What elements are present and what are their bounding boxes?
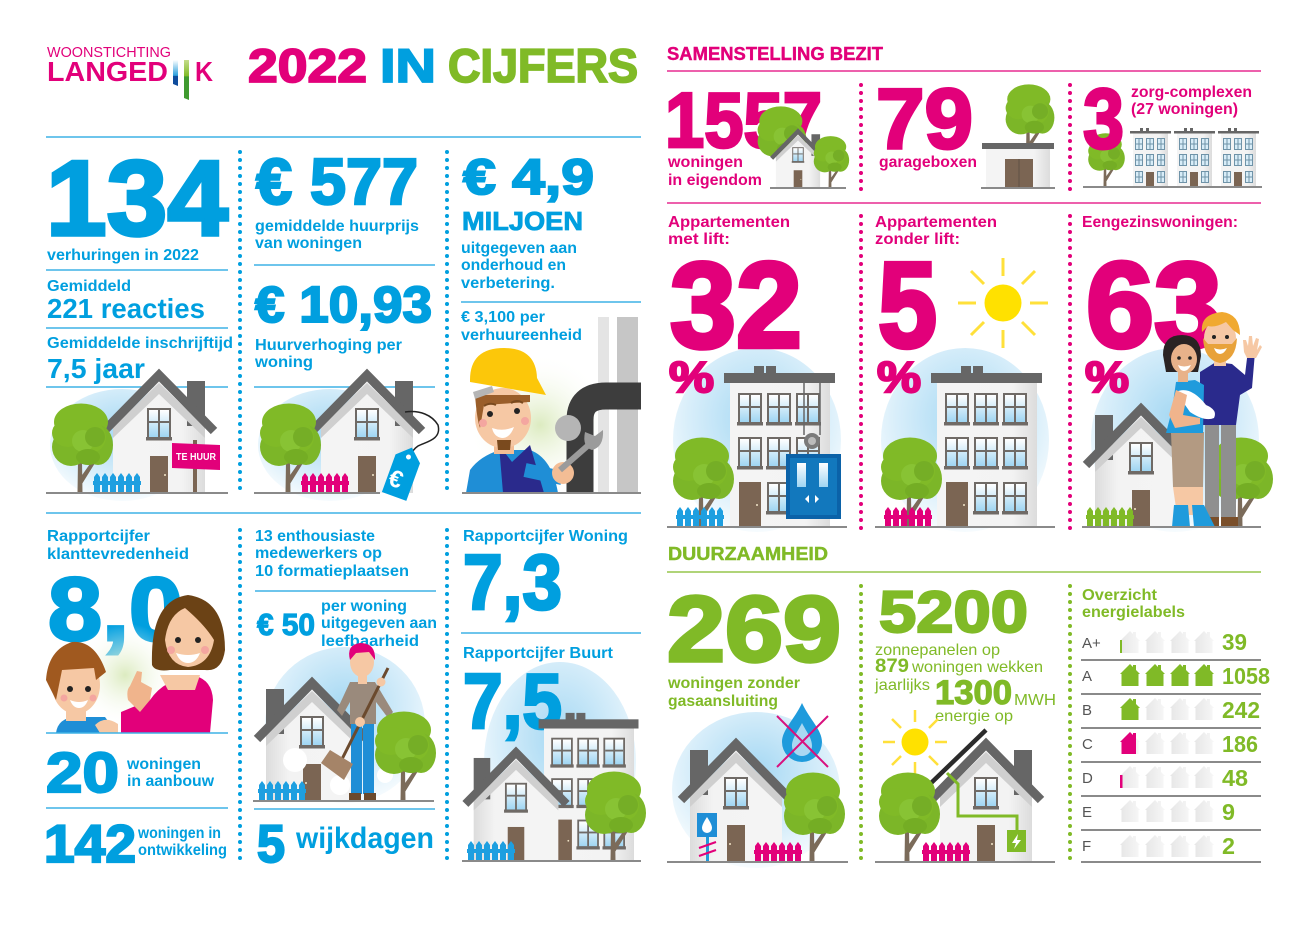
panel: onderhoud xyxy=(461,149,641,497)
row A: 1058 xyxy=(1222,663,1270,689)
illustration: three complexes xyxy=(1130,128,1259,187)
label per verhuureenheid: € 3,100 per xyxy=(461,309,545,326)
label huurverhoging xyxy=(254,337,402,371)
label ontwikkeling: ontwikkeling xyxy=(138,842,227,859)
row D: D xyxy=(1082,770,1093,787)
illustration: apartment with lift xyxy=(673,366,841,527)
illustration: boy and mother xyxy=(46,595,225,733)
label zonder lift: zonder lift: xyxy=(875,231,960,248)
illustration: house with price tag: € xyxy=(385,464,407,494)
logo: LANGED xyxy=(47,56,168,87)
label onderhoud: verbetering. xyxy=(461,275,555,292)
label zonnepanelen: energie op xyxy=(935,708,1013,725)
big number 8,0: 8,0 xyxy=(48,560,183,660)
label onderhoud: onderhoud en xyxy=(461,257,566,274)
illustration: house with solar panel xyxy=(879,730,1041,862)
label rapportcijfer: Rapportcijfer xyxy=(47,528,150,545)
percent sign: % xyxy=(877,353,921,402)
halo: eengezins xyxy=(1091,348,1259,532)
panel: huurprijs xyxy=(254,145,439,501)
icon: sun xyxy=(958,258,1048,348)
row E xyxy=(1082,799,1235,825)
big number 7,3: 7,3 xyxy=(463,538,562,626)
panel: gasaansluiting xyxy=(667,577,848,868)
big number 5200: 5200 xyxy=(879,580,1028,645)
label medewerkers: 13 enthousiaste xyxy=(255,528,375,545)
big number 4,9: € 4,9 xyxy=(463,149,594,205)
row F: F xyxy=(1082,838,1091,855)
label huurprijs xyxy=(255,218,419,252)
label buurt: Rapportcijfer Buurt xyxy=(463,645,614,662)
row D: 48 xyxy=(1222,765,1248,791)
big number 5: 5 xyxy=(257,815,285,874)
big number 269: 269 xyxy=(667,577,841,681)
big number 134: 134 xyxy=(46,138,228,258)
icon: sun small xyxy=(883,710,947,774)
label eengezinswoningen: Eengezinswoningen: xyxy=(1082,214,1238,231)
heading: samenstelling bezit: SAMENSTELLING BEZIT xyxy=(667,44,883,64)
title: IN xyxy=(380,39,436,92)
panel: zonnepanelen xyxy=(874,580,1056,862)
label aanbouw xyxy=(126,756,215,790)
label huurverhoging: Huurverhoging per xyxy=(255,337,402,354)
illustration: house without gas xyxy=(672,712,845,868)
label aanbouw: woningen xyxy=(126,756,201,773)
label gasaansluiting: woningen zonder xyxy=(667,675,800,692)
heading energielabels: energielabels xyxy=(1082,604,1185,621)
title: 2022 xyxy=(248,39,367,92)
row A+ xyxy=(1082,629,1247,655)
panel: zorg-complexen xyxy=(1083,72,1262,187)
row C xyxy=(1082,732,1258,754)
label eigendom xyxy=(667,154,762,189)
logo xyxy=(47,44,213,100)
panel: energielabels xyxy=(1081,587,1270,862)
panel: eengezinswoningen xyxy=(1082,214,1273,532)
label zonnepanelen: woningen wekken xyxy=(911,659,1043,676)
illustration: tree behind number xyxy=(1088,133,1125,187)
row B: B xyxy=(1082,702,1092,719)
big number 3: 3 xyxy=(1083,72,1124,167)
big number 20: 20 xyxy=(46,741,119,805)
percent sign: % xyxy=(669,353,714,402)
halo: buurt xyxy=(484,662,636,862)
row A xyxy=(1082,663,1270,689)
illustration: small house xyxy=(758,106,849,188)
illustration: family and house xyxy=(1086,312,1273,527)
big number 10,93: € 10,93 xyxy=(255,276,432,333)
label eigendom: in eigendom xyxy=(668,172,762,189)
halo: zonder lift xyxy=(881,348,1049,532)
label huurprijs: van woningen xyxy=(255,235,362,252)
label ontwikkeling xyxy=(137,825,227,859)
label zorg-complexen xyxy=(1131,84,1252,118)
panel: medewerkers xyxy=(253,528,437,874)
row D xyxy=(1082,765,1248,791)
heading energielabels xyxy=(1082,587,1185,621)
illustration: garage xyxy=(982,84,1054,188)
inschrijftijd: 7,5 jaar xyxy=(47,353,145,384)
label met lift: Appartementen xyxy=(668,214,790,231)
label gasaansluiting: gasaansluiting xyxy=(668,693,778,710)
label garageboxen: garageboxen xyxy=(879,154,977,171)
label per verhuureenheid: verhuureenheid xyxy=(461,327,582,344)
big number 1557: 1557 xyxy=(665,76,822,164)
label eigendom: woningen xyxy=(667,154,743,171)
label huurverhoging: woning xyxy=(254,354,313,371)
label verhuringen: verhuringen in 2022 xyxy=(47,247,199,264)
big number 32: 32 xyxy=(670,237,802,373)
row B xyxy=(1082,697,1260,723)
label onderhoud xyxy=(461,240,577,292)
reacties: 221 reacties xyxy=(47,293,205,324)
row B: 242 xyxy=(1222,697,1260,723)
label zonnepanelen: 1300 xyxy=(935,674,1012,712)
row E: E xyxy=(1082,804,1092,821)
label medewerkers: 10 formatieplaatsen xyxy=(255,563,409,580)
logo: WOONSTICHTING xyxy=(47,44,171,61)
inschrijftijd xyxy=(47,335,233,384)
percent sign: % xyxy=(1085,353,1129,402)
big number 577: € 577 xyxy=(256,145,418,218)
label met lift: met lift: xyxy=(668,231,730,248)
label zonnepanelen: jaarlijks xyxy=(874,677,930,694)
title: CIJFERS xyxy=(448,39,638,92)
title xyxy=(248,39,638,92)
big number 79: 79 xyxy=(876,72,973,167)
reacties: Gemiddeld xyxy=(47,278,131,295)
label per verhuureenheid xyxy=(461,309,582,344)
label leefbaarheid: per woning xyxy=(321,598,407,615)
row F xyxy=(1082,833,1235,859)
panel: appartementen zonder lift xyxy=(875,214,1055,532)
label zorg-complexen: (27 woningen) xyxy=(1131,101,1238,118)
big number 7,5: 7,5 xyxy=(463,657,562,745)
miljoen: MILJOEN xyxy=(462,206,583,236)
row C: C xyxy=(1082,736,1093,753)
illustration: house with price tag xyxy=(258,375,439,501)
halo: met lift xyxy=(673,348,841,532)
label zonnepanelen: MWH xyxy=(1014,692,1056,709)
label leefbaarheid: leefbaarheid xyxy=(321,633,419,650)
label zonder lift: Appartementen xyxy=(875,214,997,231)
label zonnepanelen xyxy=(874,642,1056,725)
heading: duurzaamheid: DUURZAAMHEID xyxy=(668,544,828,564)
panel: verhuringen xyxy=(46,138,233,501)
big number 5: 5 xyxy=(878,237,937,373)
panel: rapportcijfers woning en buurt xyxy=(461,528,646,862)
row A: A xyxy=(1082,668,1092,685)
illustration: house te huur: TE HUUR xyxy=(176,451,216,463)
label leefbaarheid xyxy=(321,598,437,650)
label rapportcijfer xyxy=(47,528,189,563)
illustration: worker and pipe xyxy=(466,317,641,497)
label zonder lift xyxy=(875,214,997,248)
label met lift xyxy=(668,214,790,248)
big number 63: 63 xyxy=(1086,237,1222,373)
label huurprijs: gemiddelde huurprijs xyxy=(255,218,419,235)
label zonnepanelen: zonnepanelen op xyxy=(875,642,1000,659)
label onderhoud: uitgegeven aan xyxy=(461,240,577,257)
row C: 186 xyxy=(1222,731,1258,757)
icon: gas flame crossed xyxy=(777,703,828,767)
row F: 2 xyxy=(1222,833,1235,859)
row A+: A+ xyxy=(1082,635,1101,652)
label medewerkers xyxy=(255,528,409,580)
panel: woningen in eigendom xyxy=(665,76,849,189)
label zorg-complexen: zorg-complexen xyxy=(1131,84,1252,101)
inschrijftijd: Gemiddelde inschrijftijd xyxy=(47,335,233,352)
label zonnepanelen: 879 xyxy=(875,656,909,677)
illustration: apartment xyxy=(881,366,1042,527)
reacties xyxy=(47,278,205,324)
panel: garageboxen xyxy=(876,72,1055,188)
logo: K xyxy=(195,56,213,87)
big number 142: 142 xyxy=(44,815,136,874)
illustration: neighbourhood xyxy=(465,713,646,861)
label rapportcijfer: klanttevredenheid xyxy=(47,546,189,563)
label ontwikkeling: woningen in xyxy=(137,825,221,842)
panel: appartementen met lift xyxy=(667,214,847,532)
panel: klanttevredenheid xyxy=(44,528,228,874)
label wijkdagen: wijkdagen xyxy=(295,822,434,855)
label medewerkers: medewerkers op xyxy=(255,545,382,562)
label leefbaarheid: uitgegeven aan xyxy=(321,615,437,632)
row A+: 39 xyxy=(1222,629,1247,655)
label woning: Rapportcijfer Woning xyxy=(463,528,628,545)
number 50 euro: € 50 xyxy=(257,607,315,642)
label gasaansluiting xyxy=(667,675,800,710)
label aanbouw: in aanbouw xyxy=(127,773,215,790)
illustration: sweeping man xyxy=(257,643,436,803)
row E: 9 xyxy=(1222,799,1235,825)
heading energielabels: Overzicht xyxy=(1082,587,1158,604)
illustration: house te huur xyxy=(50,375,220,501)
